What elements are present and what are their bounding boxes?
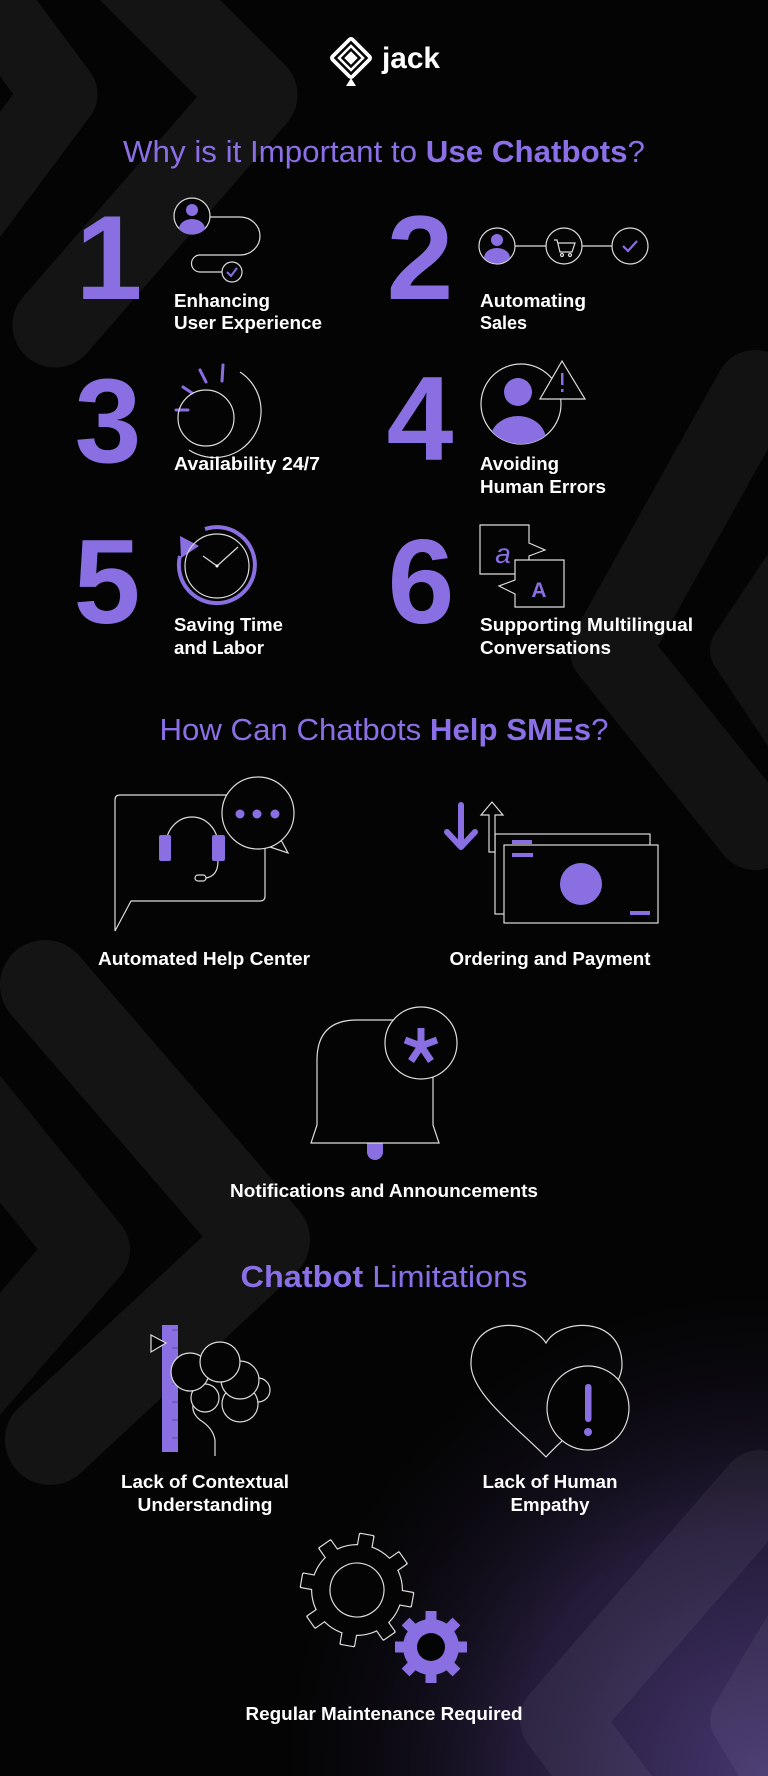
icon: sales flow [479,228,648,264]
label 2: Sales [480,313,527,333]
label: empathy: Lack of Human [482,1472,618,1492]
number 4: 4 [387,352,454,486]
icon: translation bubbles: a [495,538,511,569]
label 5: and Labor [174,638,264,658]
logo [328,35,440,86]
icon: sun and moon [176,365,261,458]
number 6: 6 [388,515,454,649]
title: limitations: Chatbot Limitations [240,1259,528,1294]
item 2 [387,191,648,333]
label 6: Conversations [480,638,611,658]
number 1: 1 [76,191,142,325]
panel: ordering and payment [447,802,658,969]
item 5 [74,515,283,658]
number 3: 3 [75,354,141,488]
label 4: Human Errors [480,477,606,497]
icon: logo mark [328,35,374,86]
label: empathy: Empathy [510,1495,590,1515]
label 4: Avoiding [480,454,559,474]
icon: clock [179,527,255,603]
label: contextual: Understanding [138,1495,272,1515]
panel: contextual understanding [121,1325,289,1515]
icon: translation bubbles: A [531,579,547,602]
icon: bell [311,1007,457,1160]
icon: translation bubbles [480,525,564,607]
label 1: User Experience [174,313,322,333]
number 5: 5 [74,515,140,649]
label: automated help center: Automated Help Center [98,949,310,969]
title: why important: Why is it Important to Use Chatbots? [123,134,645,169]
number 2: 2 [387,191,453,325]
label 6: Supporting Multilingual [480,615,693,635]
icon: user journey [174,198,260,282]
icon: headset chat [115,777,294,931]
icon: cards with arrows [447,802,658,923]
icon: person with warning [480,360,586,445]
panel: automated help center [98,777,310,969]
panel: maintenance [246,1524,522,1724]
item 1 [76,191,322,333]
title: how help SMEs: How Can Chatbots Help SMEs? [160,712,608,747]
label: maintenance: Regular Maintenance Required [246,1704,522,1724]
icon: gears [291,1524,467,1683]
label 2: Automating [480,291,586,311]
label 5: Saving Time [174,615,283,635]
label: ordering and payment: Ordering and Payment [450,949,651,969]
panel: notifications [230,1007,538,1201]
label: notifications: Notifications and Announcements [230,1181,538,1201]
item 4 [387,352,606,497]
panel: human empathy [471,1325,629,1515]
item 3 [75,354,320,488]
icon: brain and ruler [151,1325,270,1456]
label: contextual: Lack of Contextual [121,1472,289,1492]
label 1: Enhancing [174,291,270,311]
logo text: jack [381,42,440,75]
icon: heart with alert [471,1325,629,1457]
label 3: Availability 24/7 [174,454,320,474]
item 6 [388,515,693,658]
